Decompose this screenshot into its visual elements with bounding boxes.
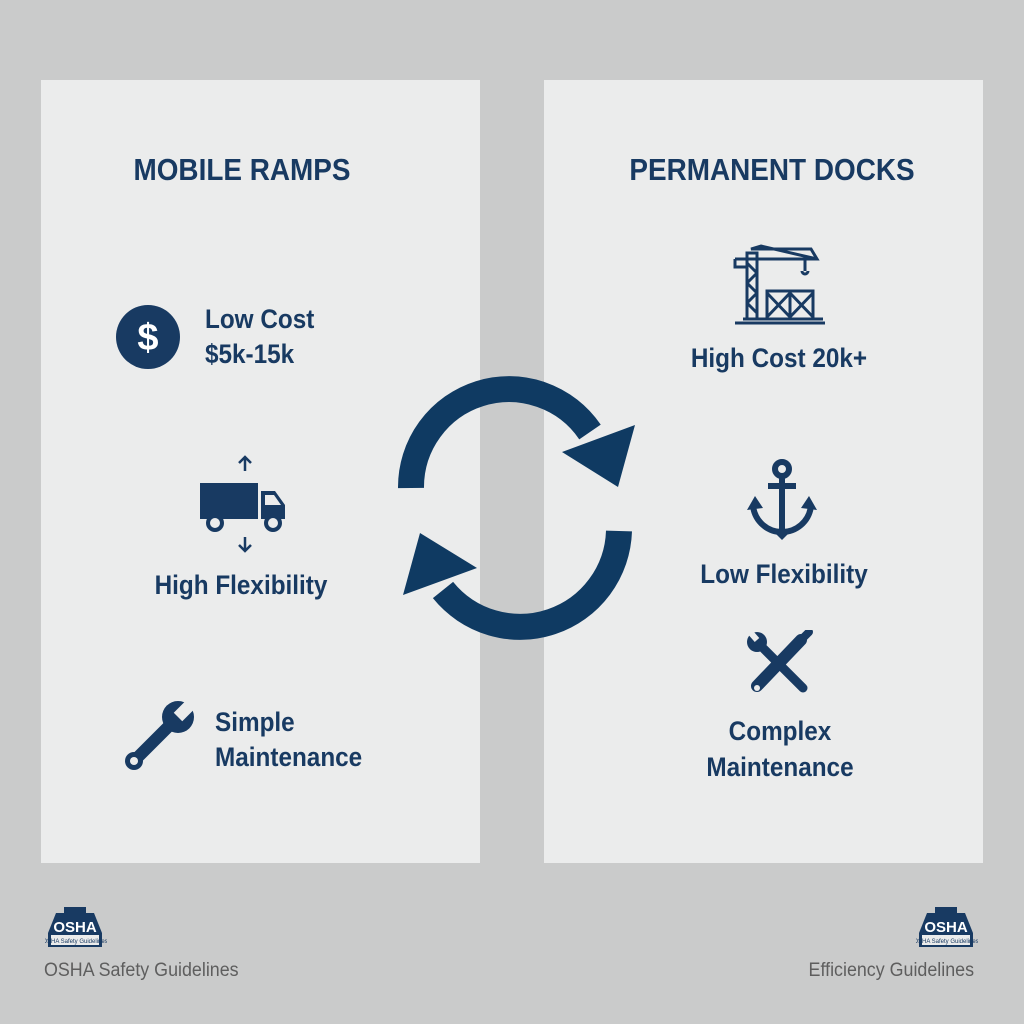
icon: dollar xyxy=(116,305,180,369)
text: simple maintenance xyxy=(215,707,362,772)
text: simple maintenance: Maintenance xyxy=(215,742,362,772)
text: low flexibility: Low Flexibility xyxy=(700,559,868,589)
footer text left: OSHA Safety Guidelines xyxy=(44,960,239,981)
heading: permanent docks: PERMANENT DOCKS xyxy=(629,152,915,187)
logo: osha right: OSHA xyxy=(924,919,968,936)
text: simple maintenance: Simple xyxy=(215,707,295,737)
icon: dollar: $ xyxy=(137,317,159,359)
icon: anchor xyxy=(747,459,817,540)
panel: permanent docks xyxy=(544,80,983,863)
text: complex maintenance: Maintenance xyxy=(706,752,854,782)
icon: crossed tools xyxy=(747,630,813,692)
panel: mobile ramps xyxy=(41,80,480,863)
text: low cost: Low Cost xyxy=(205,304,314,334)
text: high flexibility: High Flexibility xyxy=(155,570,327,600)
icon: wrench xyxy=(125,701,194,770)
logo: osha right xyxy=(916,907,978,947)
logo: osha left: OSHA xyxy=(53,919,97,936)
logo: osha left xyxy=(45,907,107,947)
text: complex maintenance: Complex xyxy=(729,716,831,746)
text: low cost xyxy=(205,304,314,369)
icon: truck with arrows xyxy=(200,455,285,553)
text: low cost: $5k-15k xyxy=(205,339,294,369)
footer text right: Efficiency Guidelines xyxy=(809,960,974,981)
text: complex maintenance xyxy=(706,716,854,782)
text: high cost: High Cost 20k+ xyxy=(691,343,867,373)
icon: crane xyxy=(734,244,825,324)
heading: mobile ramps: MOBILE RAMPS xyxy=(133,152,351,187)
